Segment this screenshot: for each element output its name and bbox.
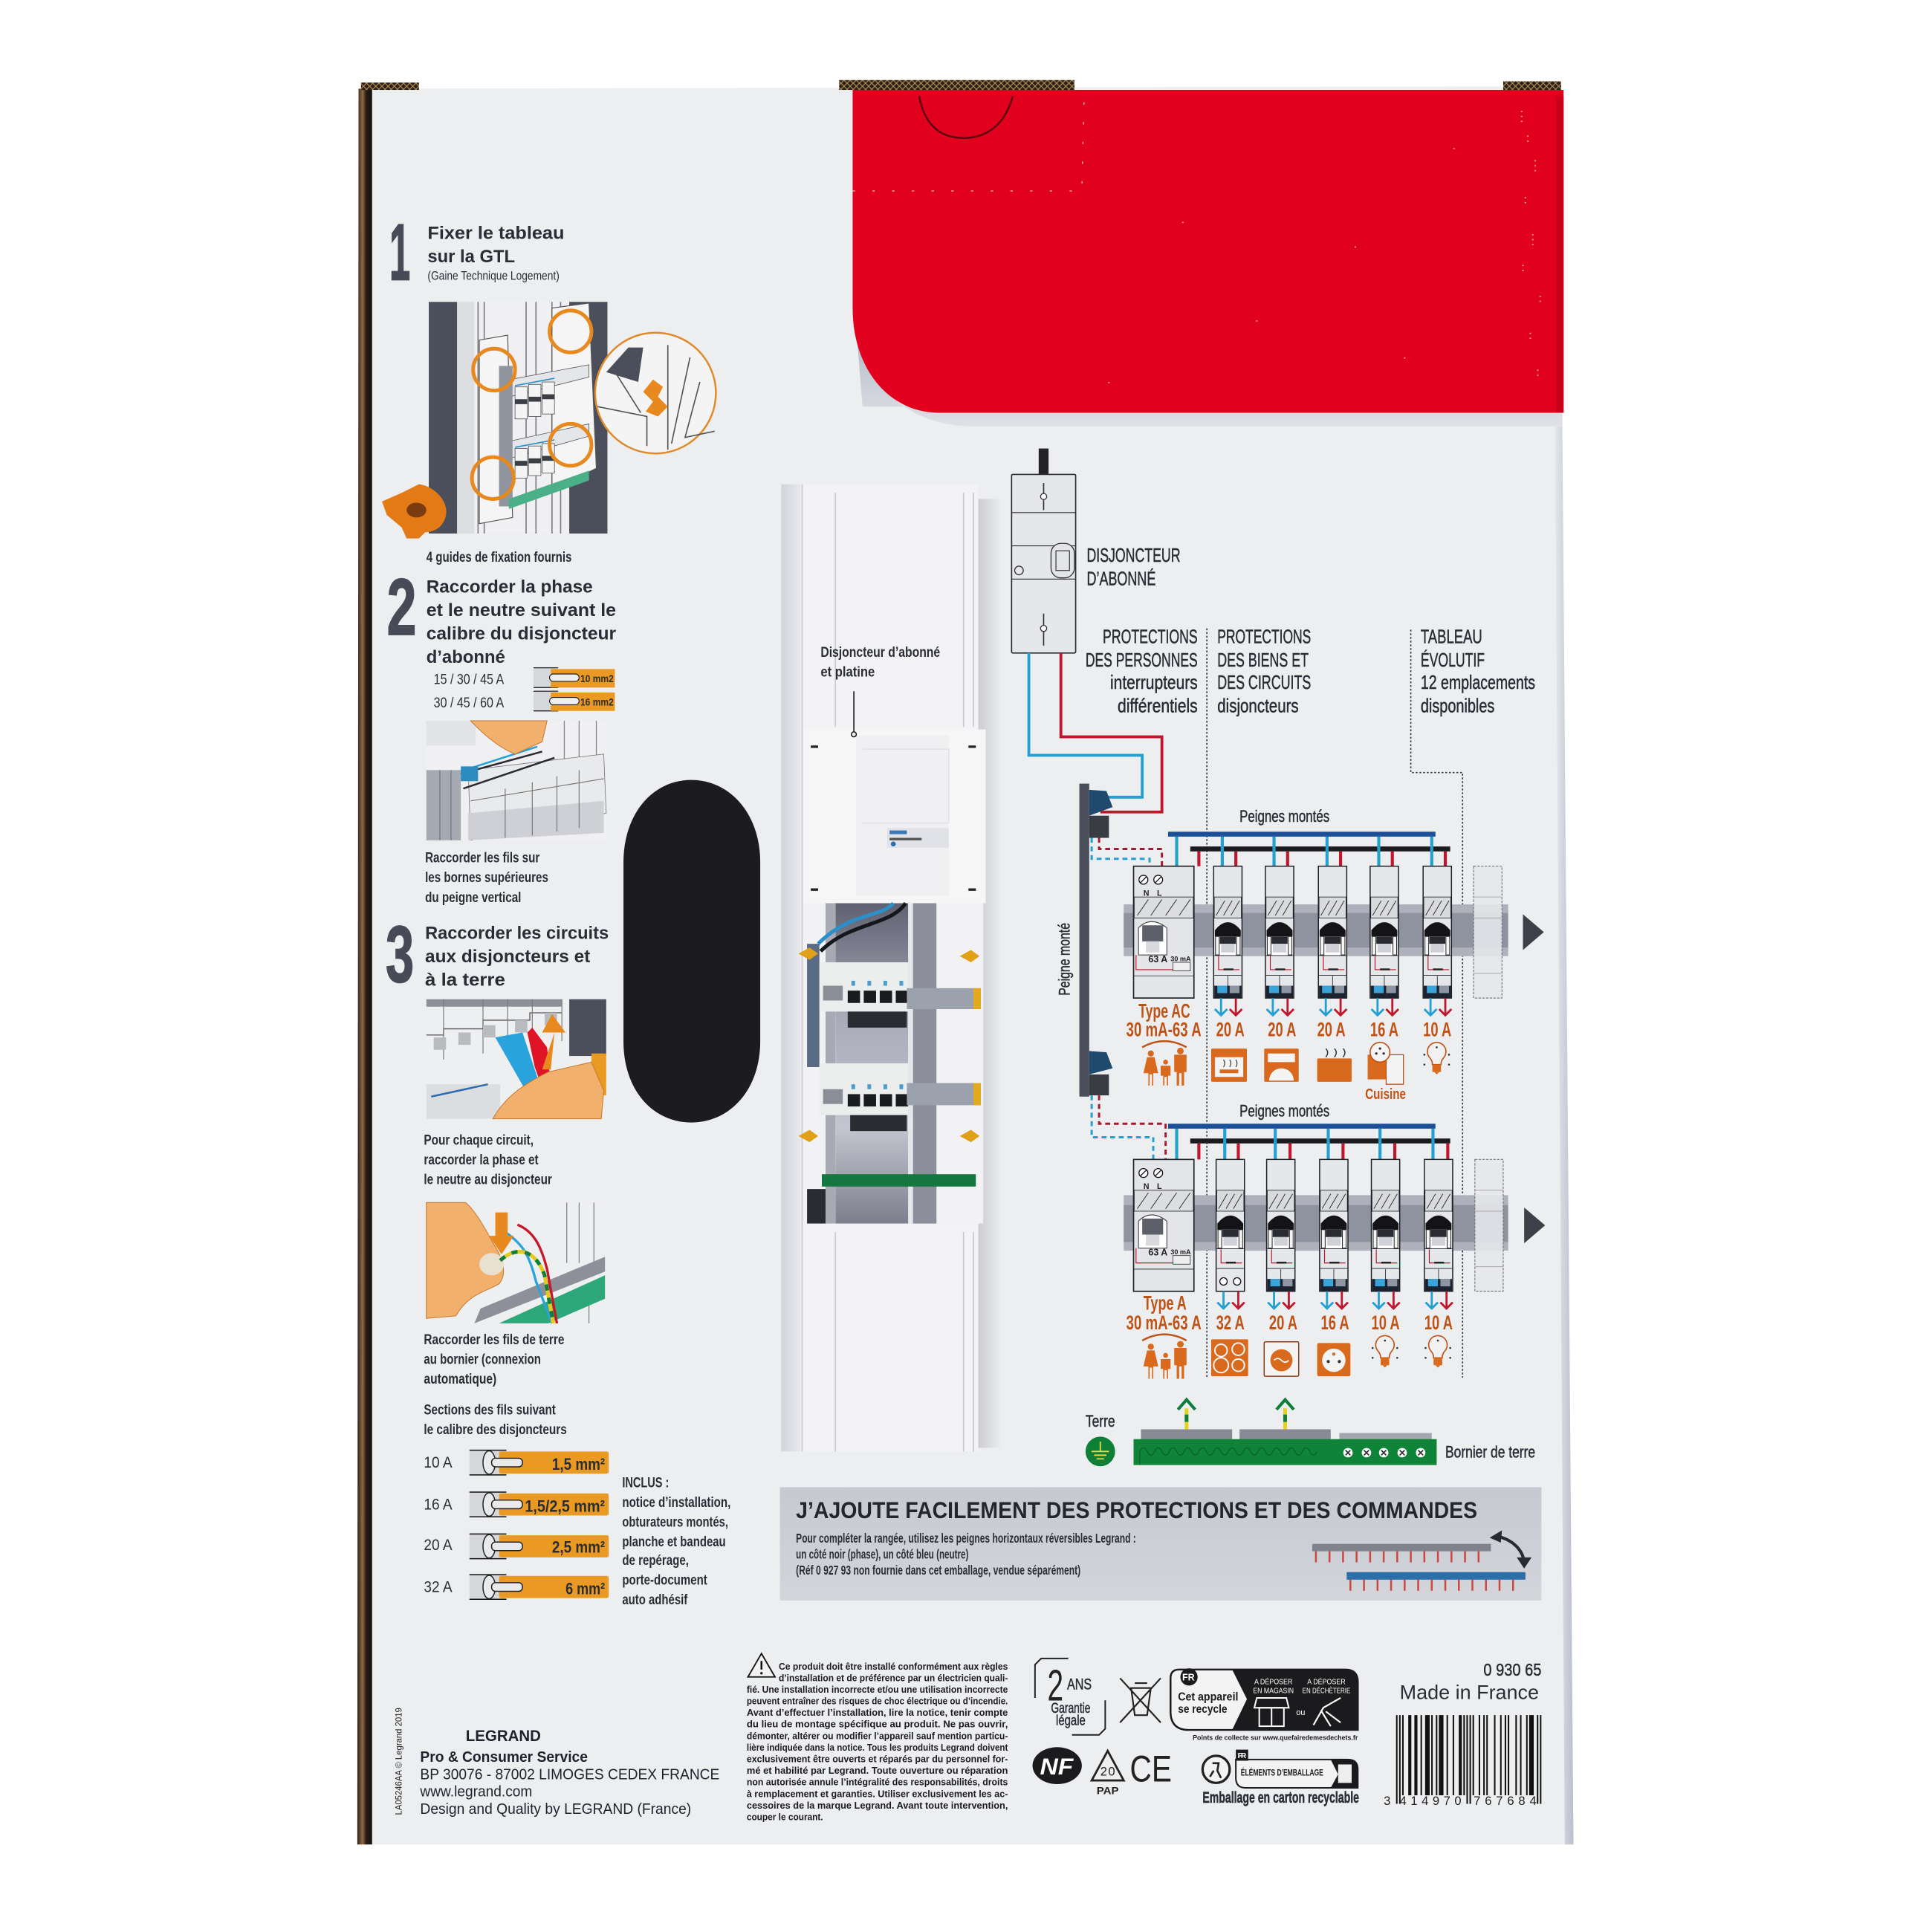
panel body [796, 1531, 1136, 1578]
ratings: 30 mA-63 A [1127, 1312, 1202, 1334]
20 A row: 2,5 mm² [552, 1537, 605, 1556]
differential: 30 mA [1170, 955, 1191, 962]
screws [1343, 1448, 1425, 1458]
DIN rail [1124, 1195, 1508, 1251]
ratings: 30 mA-63 A [1127, 1019, 1202, 1041]
DIN rail [1124, 904, 1508, 956]
ratings: 10 A [1424, 1312, 1453, 1334]
flap scuffs [1109, 111, 1540, 384]
ratings: 16 A [1321, 1312, 1349, 1334]
icon: earth symbol [1086, 1436, 1115, 1466]
caption: guides: 4 guides de fixation fournis [427, 550, 571, 565]
included list: obturateurs montés, [622, 1514, 728, 1530]
illustration: earth terminal [427, 1202, 605, 1323]
warning text: d’installation et de préférence par un électricien quali- [779, 1672, 1008, 1683]
label: bornier de terre: Bornier de terre [1445, 1443, 1535, 1462]
sections heading: Sections des fils suivant [424, 1403, 556, 1419]
warning text: mé et habilité par Legrand. Toute ouverture ou réparation [747, 1765, 1008, 1776]
label: peignes: Peignes montés [1239, 1101, 1329, 1120]
label: protections des biens: disjoncteurs [1217, 696, 1299, 716]
included list: notice d’installation, [622, 1495, 730, 1511]
vertical comb [807, 944, 820, 1067]
step 1 heading [427, 224, 564, 282]
icon: dishwasher [1264, 1048, 1299, 1082]
combs [1168, 1124, 1450, 1159]
red flap [839, 80, 1563, 412]
wire 10 mm2 [534, 668, 615, 687]
spare module [1474, 866, 1502, 998]
differential: L [1157, 1182, 1162, 1191]
recycling info badge: EN DÉCHÈTERIE [1303, 1687, 1351, 1695]
step 1 heading: Fixer le tableau [427, 224, 564, 244]
ratings [1127, 1292, 1453, 1334]
label: protections des personnes [1086, 627, 1198, 716]
flap right edge [1556, 96, 1563, 412]
step 2 caption [425, 851, 548, 906]
spare module [1475, 1159, 1503, 1291]
legal guarantee: ANS [1067, 1674, 1092, 1693]
label: disjoncteur d'abonné: DISJONCTEUR [1086, 545, 1181, 566]
recycling info badge: FR [1182, 1673, 1195, 1683]
step 2 heading [427, 577, 616, 667]
included list: de repérage, [622, 1553, 689, 1569]
flap notch [919, 96, 1013, 138]
ratings: 20 A [1317, 1019, 1346, 1041]
ratings: 20 A [1216, 1019, 1245, 1041]
differential: N [1144, 1182, 1150, 1191]
legal guarantee [1035, 1659, 1105, 1735]
company address: www.legrand.com [419, 1784, 532, 1800]
icon: light [1372, 1335, 1398, 1368]
warning text: non autorisée annule l’intégralité des responsabilités, droits [747, 1777, 1008, 1788]
label: protections des biens [1217, 627, 1311, 716]
step 2 illustration [427, 721, 606, 840]
orange guide circles [472, 311, 591, 499]
icon: family [1142, 1335, 1187, 1378]
step 1 heading: (Gaine Technique Logement) [427, 268, 560, 282]
warning text: Ce produit doit être installé conformément aux règles [779, 1661, 1008, 1672]
illustration caption 3: raccorder la phase et [424, 1153, 539, 1168]
step 3 heading: à la terre [425, 970, 505, 991]
icon: oven [1211, 1048, 1247, 1082]
illustration caption 4: Raccorder les fils de terre [424, 1332, 564, 1348]
ratings: 20 A [1268, 1019, 1296, 1041]
included list: auto adhésif [622, 1592, 688, 1608]
included list: INCLUS : [622, 1475, 669, 1491]
output arrows [1215, 998, 1451, 1015]
16 A row: 16 A [424, 1494, 453, 1513]
recycling info badge: EN MAGASIN [1253, 1687, 1294, 1695]
label: peigne monté: Peigne monté [1054, 923, 1073, 996]
print reference: LA05246AA © Legrand 2019 [395, 1708, 404, 1815]
label: cuisine: Cuisine [1365, 1086, 1406, 1103]
ratings: 10 A [1423, 1019, 1451, 1041]
differential: 63 A [1148, 954, 1167, 965]
recycling info badge: A DÉPOSER [1307, 1679, 1346, 1687]
label: protections des personnes: DES PERSONNES [1086, 650, 1198, 671]
16 A row: 1,5/2,5 mm² [525, 1497, 605, 1516]
differential [1134, 866, 1194, 998]
step 2 caption: les bornes supérieures [425, 870, 548, 886]
CE mark: CE [1130, 1748, 1172, 1790]
breakers [1213, 866, 1451, 998]
label: terre: Terre [1086, 1412, 1115, 1430]
illustration caption 3: le neutre au disjoncteur [424, 1172, 552, 1187]
step 3 heading: Raccorder les circuits [425, 924, 609, 944]
recycling PAP mark: 20 [1100, 1764, 1115, 1778]
label: protections des personnes: PROTECTIONS [1103, 627, 1198, 648]
earth arrows [1178, 1400, 1294, 1429]
subscriber breaker [1011, 449, 1076, 653]
label: disjoncteur et platine [820, 645, 940, 737]
label: tableau évolutif: 12 emplacements [1421, 672, 1535, 693]
recycling info badge [1170, 1668, 1358, 1730]
company address: LEGRAND [466, 1726, 541, 1745]
magnified detail [595, 333, 716, 453]
illustration caption 4: au bornier (connexion [424, 1352, 541, 1368]
fixing screws [798, 947, 979, 1142]
icon: heater [1317, 1048, 1352, 1082]
label: tableau évolutif: ÉVOLUTIF [1421, 649, 1485, 671]
icon: shop [1254, 1698, 1288, 1726]
arrow right [1524, 1208, 1545, 1243]
differential: L [1157, 889, 1162, 898]
collection points: Points de collecte sur www.quefairedemesdechets.fr [1193, 1734, 1358, 1742]
20 A row: 20 A [424, 1535, 453, 1554]
differential: 30 mA [1170, 1248, 1191, 1256]
step 2 heading: et le neutre suivant le [427, 600, 616, 620]
32 A row: 6 mm² [565, 1580, 605, 1598]
box right edge [1555, 427, 1573, 1844]
panel body: (Réf 0 927 93 non fournie dans cet emballage, vendue séparément) [796, 1563, 1080, 1578]
icon: light [1424, 1043, 1450, 1074]
label: disjoncteur et platine: et platine [820, 664, 875, 680]
recycling PAP mark: PAP [1097, 1784, 1119, 1796]
wiring diagram [1011, 449, 1545, 1466]
calibres: 15 / 30 / 45 A [434, 672, 504, 687]
step 2 heading: calibre du disjoncteur [427, 624, 616, 644]
wires [818, 903, 893, 944]
wall dark panels [429, 302, 607, 534]
orange guide piece [382, 484, 447, 539]
supply wires [1029, 653, 1162, 812]
top row [1124, 807, 1544, 1103]
differential: 63 A [1148, 1248, 1167, 1258]
ratings: Type A [1144, 1292, 1187, 1315]
step 3 heading [425, 924, 609, 991]
ratings: 10 A [1372, 1312, 1400, 1334]
included list [622, 1475, 730, 1608]
label: peignes: Peignes montés [1239, 807, 1329, 826]
label: tableau évolutif [1421, 627, 1535, 716]
company address: BP 30076 - 87002 LIMOGES CEDEX FRANCE [420, 1766, 719, 1783]
product reference: 0 930 65 [1483, 1660, 1541, 1679]
corrugated left side [357, 88, 372, 1844]
icon: crossed-out bin [1120, 1678, 1161, 1722]
illustration caption 4 [424, 1332, 564, 1387]
label: tableau évolutif: TABLEAU [1421, 627, 1482, 648]
ratings: 16 A [1370, 1019, 1398, 1041]
green bar [1134, 1439, 1436, 1465]
20 A row [424, 1534, 609, 1559]
bottom row [1124, 1101, 1545, 1378]
sections heading: le calibre des disjoncteurs [424, 1422, 567, 1438]
warning text: Avant d’effectuer l’installation, lire la notice, tenir compte [747, 1707, 1008, 1718]
illustration caption 4: automatique) [424, 1372, 496, 1387]
icon: hob [1211, 1339, 1248, 1376]
step 2 heading: Raccorder la phase [427, 577, 593, 597]
illustration caption 3 [424, 1132, 552, 1187]
step 3 heading: aux disjoncteurs et [425, 947, 590, 967]
ratings: 32 A [1216, 1312, 1245, 1334]
illustration: phase and neutral [427, 999, 606, 1119]
differential [1134, 1159, 1194, 1291]
label: protections des biens: DES CIRCUITS [1217, 672, 1311, 693]
legal guarantee: Garantie [1051, 1701, 1090, 1717]
warning text: du lieu de montage spécifique au produit. Ne pas ouvrir, [747, 1719, 1008, 1730]
step 3 number: 3 [386, 910, 414, 999]
label: protections des biens: DES BIENS ET [1217, 650, 1309, 671]
corrugated top edge centre [839, 80, 1074, 90]
made in France: Made in France [1400, 1682, 1539, 1704]
ratings: Type AC [1138, 1000, 1190, 1022]
warning text: exclusivement être ouverts et réparés par du personnel for- [747, 1754, 1008, 1765]
step 2 heading: d’abonné [427, 647, 505, 667]
platine [803, 730, 986, 903]
dashed wires [1092, 838, 1166, 1159]
label: disjoncteur et platine: Disjoncteur d’abonné [820, 645, 940, 661]
panel: add protections [780, 1487, 1541, 1601]
barcode: 767684 [1474, 1794, 1537, 1808]
calibres [434, 672, 504, 711]
step 2 number: 2 [387, 562, 416, 652]
label: protections des personnes: interrupteurs [1110, 672, 1198, 693]
warning text: à remplacement et garanties. Utiliser exclusivement les ac- [747, 1788, 1008, 1799]
panel title: J’AJOUTE FACILEMENT DES PROTECTIONS ET DES COMMANDES [796, 1497, 1477, 1523]
wire 16 mm2: 16 mm2 [580, 696, 614, 707]
first breaker row [820, 962, 981, 1028]
32 A row [424, 1575, 609, 1599]
wire 10 mm2: 10 mm2 [580, 672, 614, 684]
10 A row: 10 A [424, 1453, 453, 1471]
wire sections table [424, 1450, 609, 1599]
red flap shadow [855, 314, 1563, 427]
corrugated top edge left [361, 82, 419, 90]
earth terminal [1086, 1400, 1535, 1466]
second breaker row [820, 1063, 981, 1131]
label: tableau évolutif: disponibles [1421, 696, 1494, 716]
label: protections des personnes: différentiels [1118, 696, 1198, 716]
recycling PAP mark [1092, 1751, 1124, 1796]
warning text: peuvent entraîner des risques de choc électrique ou d’incendie. [747, 1696, 1008, 1707]
breakers [515, 382, 554, 478]
warning text: fié. Une installation incorrecte et/ou une utilisation incorrecte [747, 1684, 1008, 1695]
included list: planche et bandeau [622, 1534, 726, 1550]
included list: porte-document [622, 1572, 707, 1588]
shadow [977, 499, 1002, 1448]
icon: kitchen [1368, 1043, 1404, 1084]
sections heading [424, 1403, 567, 1438]
NF mark [1033, 1747, 1082, 1784]
step 2 caption: du peigne vertical [425, 890, 521, 906]
recycling info badge: se recycle [1178, 1703, 1228, 1716]
comb black side [1312, 1544, 1491, 1563]
enclosure [479, 335, 513, 524]
packaging badge [1236, 1750, 1358, 1788]
recycling info badge: Cet appareil [1178, 1690, 1238, 1703]
arrow right [1523, 914, 1544, 950]
teeth [1141, 1429, 1432, 1440]
calibres: 30 / 45 / 60 A [434, 696, 504, 711]
10 A row [424, 1450, 609, 1475]
cavity [835, 903, 936, 1224]
packaging note: Emballage en carton recyclable [1202, 1788, 1359, 1806]
combs [1168, 832, 1450, 866]
barcode: 414970 [1400, 1794, 1462, 1808]
duct [781, 484, 979, 1451]
flap fold [852, 90, 1084, 191]
packaging badge: ÉLÉMENTS D’EMBALLAGE [1241, 1768, 1323, 1777]
reversal arrow [1490, 1530, 1531, 1569]
label: protections des biens: PROTECTIONS [1217, 627, 1311, 648]
packaging badge: FR [1238, 1752, 1246, 1760]
warning text: couper le courant. [747, 1811, 823, 1822]
warning text: démonter, altérer ou modifier l’appareil sauf mention particu- [747, 1730, 1008, 1741]
panel body: Pour compléter la rangée, utilisez les peignes horizontaux réversibles Legrand : [796, 1531, 1136, 1546]
panel body: un côté noir (phase), un côté bleu (neutre) [796, 1547, 968, 1562]
warning text: cessoires de la marque Legrand. Avant toute intervention, [747, 1800, 1008, 1811]
box face [372, 86, 1573, 1844]
warning text [747, 1661, 1008, 1822]
wire 16 mm2 [534, 691, 615, 711]
green terminal [822, 1174, 976, 1187]
breakers [1216, 1159, 1453, 1291]
ratings: 20 A [1269, 1312, 1297, 1334]
legal guarantee: 2 [1047, 1660, 1063, 1710]
product photo [781, 484, 1002, 1451]
icon: waste site [1314, 1698, 1341, 1726]
recycling info badge: ou [1296, 1708, 1305, 1717]
32 A row: 32 A [424, 1577, 453, 1595]
NF mark: NF [1040, 1753, 1074, 1780]
ratings [1127, 1000, 1451, 1041]
black handle hole [623, 780, 760, 1123]
differential: N [1144, 889, 1150, 898]
label: disjoncteur d'abonné [1086, 545, 1181, 590]
corrugated top edge right [1503, 81, 1561, 90]
text: 1 [389, 207, 410, 296]
icon: washing machine [1264, 1342, 1299, 1376]
barcode: 3 [1384, 1794, 1390, 1808]
company address [419, 1726, 719, 1818]
illustration caption 3: Pour chaque circuit, [424, 1132, 534, 1148]
comb blue side [1346, 1572, 1526, 1591]
10 A row: 1,5 mm² [552, 1455, 605, 1474]
company address: Pro & Consumer Service [420, 1749, 588, 1766]
vertical comb [1080, 784, 1112, 1097]
step 2 caption: Raccorder les fils sur [425, 851, 540, 866]
label: disjoncteur d'abonné: D’ABONNÉ [1086, 568, 1155, 590]
icon: light [1424, 1335, 1451, 1368]
output arrows [1217, 1291, 1453, 1309]
legal guarantee: légale [1056, 1713, 1086, 1728]
icon: sorting man [1202, 1756, 1230, 1783]
company address: Design and Quality by LEGRAND (France) [420, 1801, 691, 1818]
16 A row [424, 1492, 609, 1517]
recycling info badge: A DÉPOSER [1254, 1679, 1292, 1687]
warning text: lière indiquée dans la notice. Tous les produits Legrand doivent [747, 1742, 1008, 1753]
icon: family [1142, 1041, 1187, 1086]
step 1 heading: sur la GTL [427, 247, 515, 267]
step 1 illustration [429, 302, 607, 534]
barcode [1384, 1715, 1541, 1808]
warning icon [748, 1653, 775, 1677]
icon: socket [1317, 1343, 1350, 1376]
